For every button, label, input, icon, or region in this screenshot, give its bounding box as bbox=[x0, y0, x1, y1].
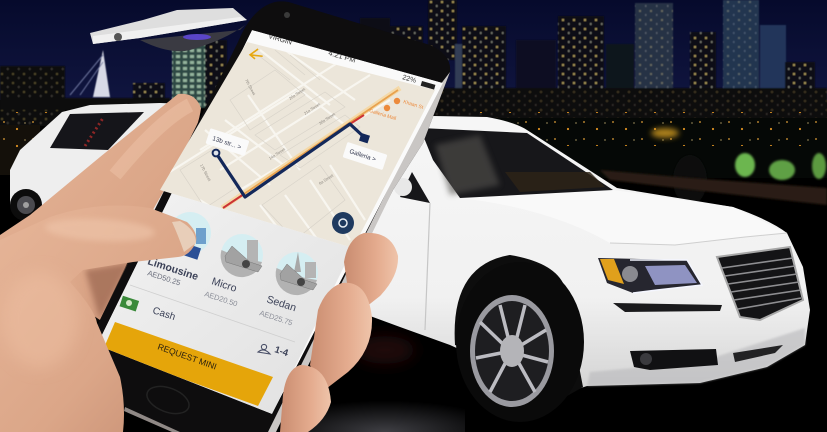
vehicle selection panel bbox=[90, 190, 353, 414]
street labels bbox=[199, 78, 337, 186]
label: 13th street: 13b str... > bbox=[211, 135, 242, 151]
map bbox=[160, 42, 435, 246]
back arrow bbox=[249, 48, 263, 60]
vehicle: micro: Micro bbox=[210, 275, 238, 295]
location button bbox=[332, 212, 354, 234]
wheel arch bbox=[455, 255, 583, 400]
bumper details bbox=[613, 303, 722, 312]
request button bbox=[103, 322, 273, 406]
hand: thumb behind phone bbox=[0, 94, 201, 320]
street labels: 8a Street bbox=[318, 172, 335, 186]
front wheel bbox=[456, 262, 584, 422]
vehicle: sedan bbox=[258, 252, 318, 327]
grille bbox=[717, 247, 803, 320]
skyline left bbox=[0, 40, 227, 126]
vehicle: limousine bbox=[146, 212, 211, 287]
payment: cash: Cash bbox=[151, 305, 177, 323]
headlight bbox=[598, 258, 702, 293]
open gull-wing door bbox=[90, 8, 247, 51]
wet ground reflection bbox=[305, 336, 465, 432]
vehicle: micro bbox=[203, 234, 263, 308]
streets bbox=[165, 50, 390, 250]
vehicle: limousine: AED50.25 bbox=[146, 268, 182, 287]
side window and mirror bbox=[400, 172, 430, 203]
street labels: 14a Street bbox=[268, 146, 287, 161]
hand: right fingers bbox=[280, 233, 398, 432]
car body bbox=[300, 116, 810, 395]
city lights and trees bbox=[0, 112, 827, 205]
camera bbox=[284, 12, 290, 18]
home button bbox=[143, 381, 193, 419]
status bar: 22% bbox=[401, 74, 417, 85]
skyline right bbox=[360, 0, 827, 128]
street labels: 21a Street bbox=[303, 101, 322, 116]
vehicle: micro: AED20.50 bbox=[203, 289, 239, 308]
hand: index finger and palm bbox=[0, 205, 196, 432]
phone body bbox=[90, 1, 450, 432]
vehicle: sedan: AED25.75 bbox=[258, 308, 294, 327]
lower bumper shading bbox=[587, 328, 805, 386]
smartphone bbox=[90, 1, 450, 432]
status bar bbox=[267, 33, 435, 90]
request button: REQUEST MINI bbox=[156, 341, 218, 372]
street labels: 7th Street bbox=[244, 78, 257, 97]
door seam bbox=[425, 203, 430, 330]
points of interest: Khaan St bbox=[402, 99, 424, 111]
finger 1 bbox=[344, 233, 398, 318]
points of interest bbox=[370, 98, 424, 120]
label: Galleria bbox=[343, 142, 387, 170]
divider bbox=[130, 285, 295, 342]
street labels: 30a Street bbox=[318, 111, 337, 126]
payment: cash bbox=[120, 296, 175, 320]
vehicle: limousine: Limousine bbox=[146, 255, 200, 283]
limousine rear section bbox=[10, 103, 200, 240]
points of interest: Galleria Mall bbox=[368, 108, 397, 122]
main road bbox=[222, 88, 400, 208]
screen bbox=[97, 30, 443, 414]
label: 13th street bbox=[206, 128, 249, 156]
vehicle: sedan: Sedan bbox=[265, 293, 298, 314]
finger 3 bbox=[280, 365, 331, 432]
windshield bbox=[420, 128, 613, 198]
passengers bbox=[256, 344, 288, 356]
passengers: 1-4 bbox=[273, 344, 290, 359]
finger 2 bbox=[310, 283, 372, 392]
hood bbox=[460, 190, 787, 245]
limousine front: white car bbox=[300, 116, 810, 422]
label: Galleria: Galleria > bbox=[348, 148, 377, 163]
route line bbox=[216, 124, 365, 197]
status bar: 4:21 PM bbox=[327, 48, 357, 65]
street labels: 20a Street bbox=[288, 86, 307, 101]
street labels: 17b Street bbox=[199, 163, 213, 183]
status bar: VIRGIN bbox=[267, 33, 293, 47]
